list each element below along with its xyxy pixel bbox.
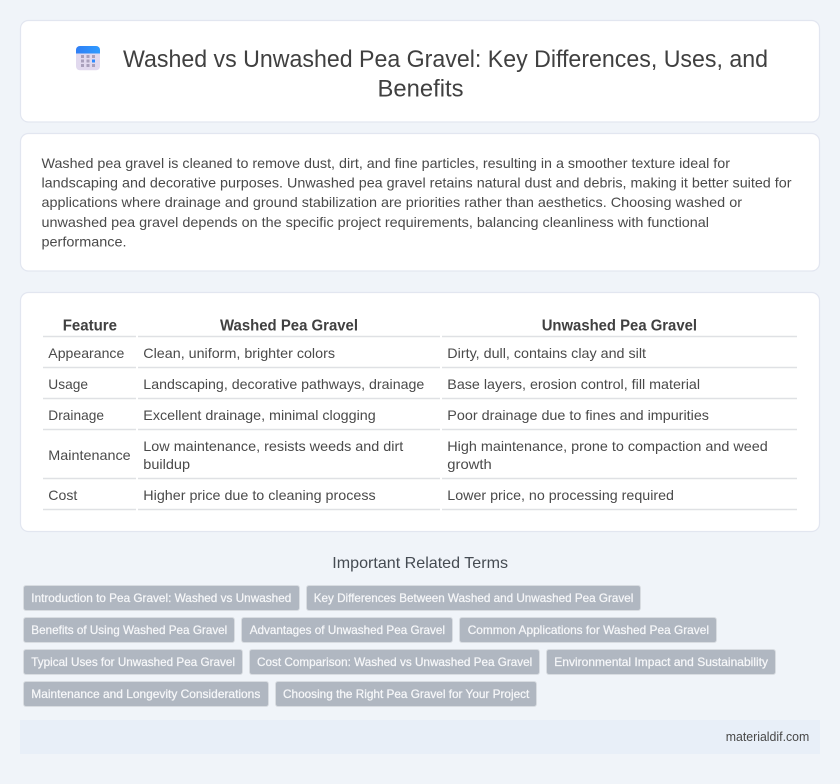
row: maintenance: growth	[447, 456, 492, 472]
row: usage: Usage	[48, 376, 88, 392]
row: appearance: Appearance	[48, 345, 125, 361]
table header row: Unwashed Pea Gravel	[542, 318, 697, 334]
intro paragraph: Washed pea gravel is cleaned to remove dust, dirt, and fine particles, resulting in a smoother texture ideal for	[42, 155, 730, 171]
row: maintenance: Maintenance	[48, 447, 131, 463]
tag: benefits	[24, 618, 234, 642]
panel: comparison table	[20, 292, 820, 532]
tag: cost comparison	[250, 650, 540, 674]
row: drainage	[48, 407, 709, 423]
tag: choosing the right gravel: Choosing the Right Pea Gravel for Your Project	[283, 687, 530, 701]
intro paragraph: unwashed pea gravel depends on the specific project requirements, balancing cleanliness with functional	[42, 214, 709, 230]
tag: environmental impact: Environmental Impact and Sustainability	[554, 655, 768, 669]
tag: common applications	[460, 618, 716, 642]
tag: cost comparison: Cost Comparison: Washed vs Unwashed Pea Gravel	[257, 655, 532, 669]
tag: benefits: Benefits of Using Washed Pea Gravel	[31, 623, 227, 637]
row: cost: Higher price due to cleaning process	[143, 487, 376, 503]
related term tags	[24, 586, 776, 706]
tag: advantages	[242, 618, 452, 642]
table header row: Feature	[63, 318, 117, 334]
intro paragraph: performance.	[42, 233, 126, 249]
tag: common applications: Common Applications for Washed Pea Gravel	[468, 623, 709, 637]
tag: maintenance and longevity: Maintenance and Longevity Considerations	[31, 687, 260, 701]
row: usage	[48, 376, 700, 392]
row: usage: Landscaping, decorative pathways, drainage	[143, 376, 425, 392]
row: appearance: Clean, uniform, brighter colors	[143, 345, 335, 361]
tag: typical uses: Typical Uses for Unwashed Pea Gravel	[31, 655, 235, 669]
row: maintenance: Low maintenance, resists weeds and dirt	[143, 438, 403, 454]
row: cost: Lower price, no processing required	[447, 487, 674, 503]
row: cost	[48, 487, 674, 503]
title	[123, 46, 768, 102]
tag: environmental impact	[546, 650, 776, 674]
intro paragraph	[42, 155, 792, 249]
tag: key differences	[306, 586, 640, 610]
table header row: Washed Pea Gravel	[220, 318, 358, 334]
row: cost: Cost	[48, 487, 77, 503]
intro paragraph: landscaping and decorative purposes. Unwashed pea gravel retains natural dust and debris, making it better suited for	[42, 175, 792, 191]
panel: introduction	[20, 134, 820, 271]
tag: key differences: Key Differences Between Washed and Unwashed Pea Gravel	[314, 591, 633, 605]
row: maintenance: buildup	[143, 456, 190, 472]
tag: choosing the right gravel	[276, 682, 536, 706]
table header row	[63, 318, 697, 334]
row: maintenance: High maintenance, prone to compaction and weed	[447, 438, 768, 454]
icon: calendar	[76, 46, 100, 70]
footer source: materialdif.com	[726, 730, 809, 744]
tag: typical uses	[24, 650, 242, 674]
tag: introduction: Introduction to Pea Gravel: Washed vs Unwashed	[31, 591, 291, 605]
title: Washed vs Unwashed Pea Gravel: Key Differences, Uses, and	[123, 46, 768, 73]
tag: introduction	[24, 586, 300, 610]
tag: maintenance and longevity	[24, 682, 268, 706]
tag: advantages: Advantages of Unwashed Pea Gravel	[250, 623, 445, 637]
footer bar	[20, 720, 820, 754]
row: appearance	[48, 345, 646, 361]
header panel	[20, 20, 820, 122]
title: Benefits	[378, 76, 464, 102]
row: drainage: Poor drainage due to fines and impurities	[447, 407, 709, 423]
heading: important related terms: Important Related Terms	[332, 555, 508, 572]
row: maintenance	[48, 438, 768, 472]
intro paragraph: applications where drainage and ground stabilization are priorities rather than aesthetics. Choosing washed or	[42, 194, 742, 210]
row: drainage: Drainage	[48, 407, 104, 423]
row: usage: Base layers, erosion control, fill material	[447, 376, 700, 392]
row: drainage: Excellent drainage, minimal clogging	[143, 407, 376, 423]
row: appearance: Dirty, dull, contains clay and silt	[447, 345, 646, 361]
